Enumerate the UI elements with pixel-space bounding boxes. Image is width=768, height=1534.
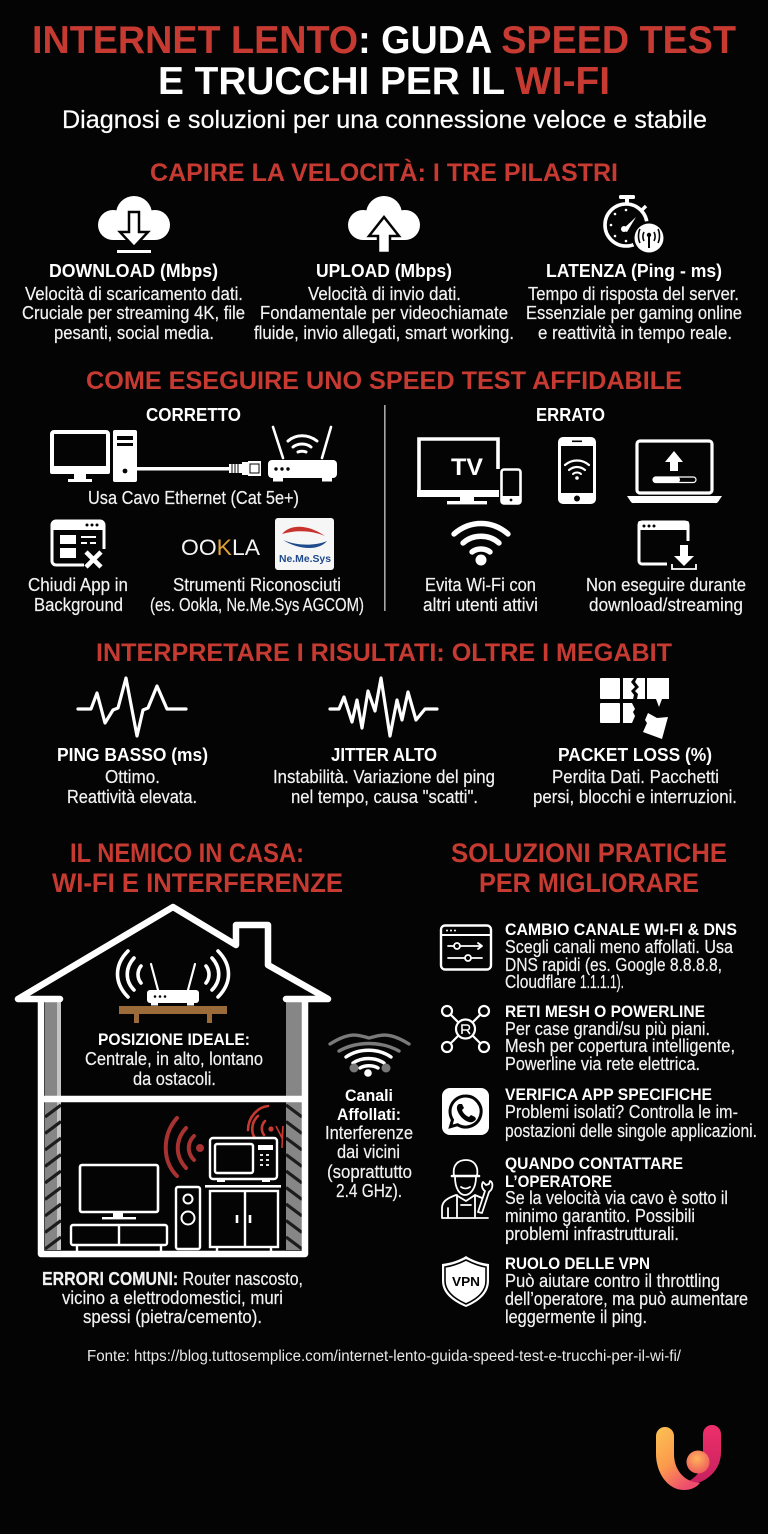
text: errori comuni: vicino a elettrodomestici, muri (62, 1287, 283, 1308)
label: corretto: CORRETTO (146, 404, 241, 425)
panel: upload (254, 196, 514, 343)
icon: cloud upload (348, 196, 420, 253)
text: ping basso description (67, 766, 197, 807)
label: ping basso: PING BASSO (ms) (57, 744, 208, 765)
text: errori comuni (42, 1268, 303, 1327)
wall bands (45, 1000, 302, 1252)
panel: download (22, 196, 245, 343)
text: posizione ideale: Centrale, in alto, lontano (85, 1048, 263, 1069)
illustration: house (18, 907, 328, 1254)
text: canali affollati: Interferenze (325, 1122, 413, 1143)
text: canali affollati: Canali (345, 1086, 393, 1105)
text: ruolo vpn: RUOLO DELLE VPN (505, 1254, 650, 1273)
icon: cloud download (98, 196, 170, 253)
text: reti mesh: Mesh per copertura intelligente, (505, 1036, 735, 1056)
text: cambio canale: 1.1.1.1). (580, 972, 624, 992)
icon: settings window (441, 926, 491, 970)
text: evita wi-fi (423, 574, 538, 615)
text: upload description (254, 283, 514, 343)
icon: stopwatch (605, 195, 666, 255)
solution: contattare operatore (442, 1154, 728, 1244)
heading: il nemico in casa: WI-FI E INTERFERENZE (52, 868, 343, 898)
heading: come eseguire: COME ESEGUIRE UNO SPEED TEST AFFIDABILE (86, 367, 682, 395)
icon: crowded wifi (330, 1035, 409, 1077)
icon: phone wifi (558, 437, 596, 504)
heading: soluzioni pratiche (451, 838, 727, 898)
heading: capire la velocità: CAPIRE LA VELOCITÀ: I TRE PILASTRI (150, 158, 618, 187)
text: latenza description: e reattività in tempo reale. (538, 322, 732, 343)
icon: technician (442, 1160, 492, 1218)
logo (656, 1425, 721, 1490)
icon: red interference waves (166, 1106, 283, 1176)
text: evita wi-fi: Evita Wi-Fi con (425, 574, 536, 595)
text: jitter description: nel tempo, causa "scatti". (291, 786, 478, 807)
icon: low ping wave (78, 678, 186, 736)
icon: vpn shield: VPN (452, 1275, 480, 1289)
logo: ookla: OOKLA (181, 535, 260, 560)
text: packet loss description: Perdita Dati. Pacchetti (552, 766, 719, 787)
text: non eseguire: Non eseguire durante (586, 574, 746, 595)
panel: errato (417, 404, 746, 615)
subtitle: Diagnosi e soluzioni per una connessione veloce e stabile (62, 106, 707, 134)
icon: desktop computer wired to router (50, 427, 337, 482)
panel: jitter alto (273, 678, 495, 807)
icon: tv and phone: TV (451, 454, 483, 481)
text: upload description: fluide, invio allegati, smart working. (254, 322, 514, 343)
text: upload description: Velocità di invio dati. (308, 283, 461, 304)
text: posizione ideale (85, 1030, 263, 1089)
text: upload description: Fondamentale per videochiamate (260, 302, 508, 323)
icon: window download (638, 521, 696, 569)
text: verifica app: Problemi isolati? Controlla le im- (505, 1102, 738, 1122)
text: contattare operatore (505, 1154, 728, 1244)
text: jitter description (273, 766, 495, 807)
text: chiudi app: Background (34, 594, 123, 615)
heading: interpretare i risultati: INTERPRETARE I RISULTATI: OLTRE I MEGABIT (96, 639, 672, 667)
text: canali affollati: Affollati: (337, 1105, 401, 1124)
label: packet loss: PACKET LOSS (%) (558, 744, 712, 765)
text: canali affollati: 2.4 GHz). (336, 1180, 402, 1201)
label: errato: ERRATO (536, 404, 605, 425)
icon: speaker (176, 1187, 200, 1249)
icon: broken packets (600, 678, 669, 739)
text: errori comuni: spessi (pietra/cemento). (83, 1306, 262, 1327)
text: ping basso description: Reattività elevata. (67, 786, 197, 807)
solution: reti mesh (442, 1002, 735, 1074)
text: chiudi app (28, 574, 128, 615)
panel: canali affollati (325, 1035, 413, 1201)
icon: close background apps (52, 521, 104, 567)
icon: cabinet (205, 1185, 281, 1251)
panel: corretto (28, 404, 364, 615)
text: non eseguire (586, 574, 746, 615)
text: cambio canale (505, 920, 737, 992)
text: cambio canale: Cloudflare (505, 972, 576, 992)
heading: soluzioni pratiche: PER MIGLIORARE (479, 868, 699, 898)
house outline (18, 907, 328, 1254)
text: packet loss description (533, 766, 737, 807)
logo: ne.me.sys: Ne.Me.Sys (279, 553, 331, 565)
text: ruolo vpn (505, 1254, 748, 1327)
text: cambio canale: CAMBIO CANALE WI-FI & DNS (505, 920, 737, 939)
panel: packet loss (533, 678, 737, 807)
text: usa cavo ethernet: Usa Cavo Ethernet (Cat 5e+) (88, 487, 299, 508)
heading: il nemico in casa (52, 838, 343, 898)
text: canali affollati: (soprattutto (327, 1161, 412, 1182)
label: latenza: LATENZA (Ping - ms) (546, 260, 722, 281)
text: latenza description: Essenziale per gaming online (526, 302, 742, 323)
text: non eseguire: download/streaming (589, 594, 743, 615)
title: INTERNET LENTO: GUDA SPEED TEST (32, 19, 736, 62)
text: strumenti riconosciuti: (es. Ookla, Ne.Me.Sys AGCOM) (150, 594, 364, 615)
text: errori comuni: ERRORI COMUNI: Router nascosto, (42, 1268, 303, 1289)
text: strumenti riconosciuti: Strumenti Riconosciuti (173, 574, 341, 595)
title (32, 19, 736, 103)
text: download description: Velocità di scaricamento dati. (25, 283, 243, 304)
title: E TRUCCHI PER IL WI-FI (158, 60, 610, 103)
text: download description (22, 283, 245, 343)
text: canali affollati (325, 1086, 413, 1201)
text: ruolo vpn: leggermente il ping. (505, 1307, 647, 1327)
text: reti mesh: Powerline via rete elettrica. (505, 1054, 700, 1074)
label: jitter alto: JITTER ALTO (331, 744, 437, 765)
text: latenza description: Tempo di risposta del server. (528, 283, 739, 304)
text: reti mesh (505, 1002, 735, 1074)
icon: wifi (454, 524, 508, 566)
solution: cambio canale (441, 920, 737, 992)
text: download description: Cruciale per streaming 4K, file (22, 302, 245, 323)
text: packet loss description: persi, blocchi e interruzioni. (533, 786, 737, 807)
text: reti mesh: Per case grandi/su più piani. (505, 1019, 710, 1039)
text: cambio canale: DNS rapidi (es. Google 8.8.8.8, (505, 955, 722, 975)
text: cambio canale: Scegli canali meno affollati. Usa (505, 937, 734, 957)
icon: laptop upload (627, 441, 722, 503)
icon: router on shelf (118, 951, 228, 1023)
solution: ruolo vpn (442, 1254, 748, 1327)
text: contattare operatore: problemi infrastrutturali. (505, 1224, 679, 1244)
text: ruolo vpn: Può aiutare contro il throttling (505, 1271, 720, 1291)
text: verifica app (505, 1085, 757, 1141)
icon: whatsapp (442, 1088, 489, 1135)
text: ruolo vpn: dell’operatore, ma può aumentare (505, 1289, 748, 1309)
text: contattare operatore: Se la velocità via cavo è sotto il (505, 1188, 728, 1208)
icon: mesh network (442, 1006, 489, 1052)
text: latenza description (526, 283, 742, 343)
icon: microwave (210, 1138, 277, 1182)
heading: soluzioni pratiche: SOLUZIONI PRATICHE (451, 838, 727, 868)
source line: Fonte: https://blog.tuttosemplice.com/internet-lento-guida-speed-test-e-trucchi-per-il-wi-fi/ (87, 1348, 682, 1365)
icon: jitter wave (330, 678, 437, 736)
text: contattare operatore: L’OPERATORE (505, 1172, 612, 1191)
label: download: DOWNLOAD (Mbps) (49, 260, 218, 281)
text: strumenti riconosciuti (150, 574, 364, 615)
solution: verifica app (442, 1085, 757, 1141)
panel: latenza (526, 195, 742, 343)
text: download description: pesanti, social media. (54, 322, 214, 343)
text: jitter description: Instabilità. Variazione del ping (273, 766, 495, 787)
text: reti mesh: RETI MESH O POWERLINE (505, 1002, 705, 1021)
text: canali affollati: dai vicini (337, 1141, 400, 1162)
text: posizione ideale: POSIZIONE IDEALE: (98, 1030, 250, 1049)
icon: tv and phone (417, 439, 522, 505)
icon: vpn shield (442, 1256, 489, 1307)
text: contattare operatore: QUANDO CONTATTARE (505, 1154, 683, 1173)
icon: tv on console (71, 1165, 167, 1251)
logo: ne.me.sys (275, 518, 334, 570)
text: verifica app: VERIFICA APP SPECIFICHE (505, 1085, 712, 1104)
text: ping basso description: Ottimo. (105, 766, 160, 787)
label: upload: UPLOAD (Mbps) (316, 260, 452, 281)
text: evita wi-fi: altri utenti attivi (423, 594, 538, 615)
text: posizione ideale: da ostacoli. (133, 1068, 216, 1089)
panel: ping basso (57, 678, 208, 807)
text: chiudi app: Chiudi App in (28, 574, 128, 595)
heading: il nemico in casa: IL NEMICO IN CASA: (70, 838, 304, 868)
text: contattare operatore: minimo garantito. Possibili (505, 1206, 695, 1226)
